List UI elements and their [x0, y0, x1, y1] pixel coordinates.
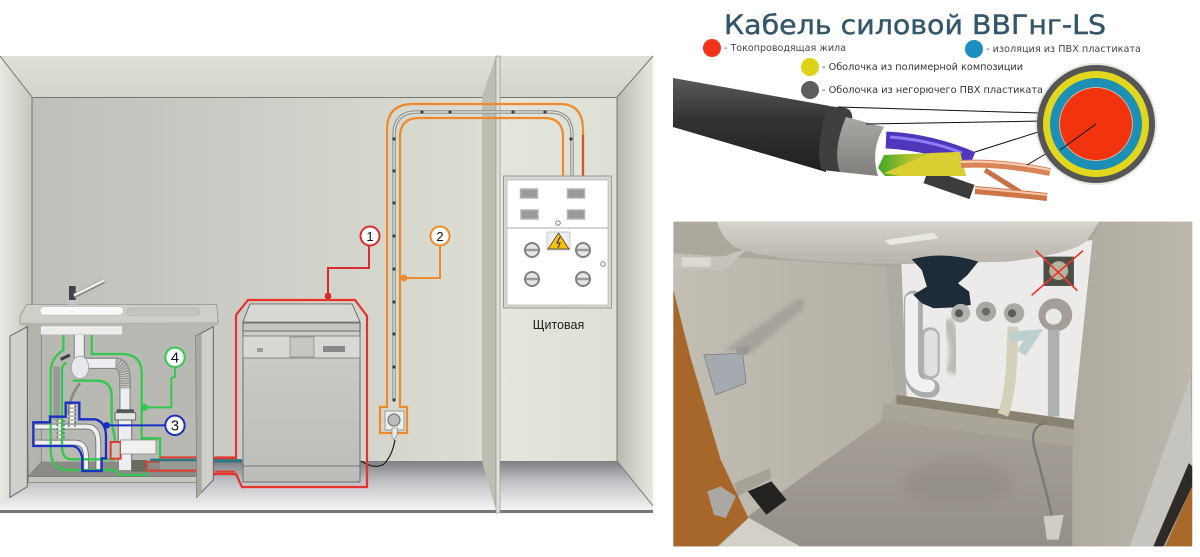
- inlet hose: [1003, 327, 1033, 415]
- shelf back strip: [896, 395, 1074, 429]
- hinge lower: [707, 468, 787, 518]
- callout 1: 1: [366, 229, 374, 244]
- breakers: [525, 243, 590, 286]
- partition wall: [482, 56, 500, 513]
- meters: [520, 189, 584, 219]
- wooden door: [673, 290, 748, 546]
- drain rubber fitting: [912, 255, 978, 308]
- green cable zone 4: [51, 335, 160, 475]
- cabinet floor: [28, 462, 197, 477]
- chrome valves: [951, 302, 1024, 323]
- cabinet floor: [748, 420, 1072, 546]
- left cabinet side: [27, 325, 42, 477]
- label: switch room: Щитовая: [533, 318, 584, 332]
- countertop: [20, 305, 218, 324]
- counter underside: [21, 323, 218, 325]
- appliance power lead: [361, 440, 395, 466]
- callout 2: 2: [436, 229, 444, 244]
- purple conductor: [886, 140, 972, 160]
- callout 3: 3: [171, 419, 179, 435]
- plate tab: [736, 345, 749, 355]
- legend: conductor: [703, 39, 846, 57]
- cabinet interior: [28, 323, 213, 477]
- black conductor: [926, 176, 972, 192]
- sticker: [885, 233, 939, 245]
- shelf lip: [881, 404, 1074, 446]
- electrical box: [111, 440, 156, 472]
- sink underside: [717, 222, 1099, 264]
- photo base: [673, 222, 1192, 546]
- teal cable: [160, 459, 242, 462]
- callout 3: [103, 416, 185, 435]
- cable cross-section circles: [1035, 63, 1157, 185]
- back wall of switch room: [500, 97, 617, 462]
- light corner lower left: [719, 518, 800, 546]
- wall post: [886, 267, 907, 396]
- floor base strip: [0, 510, 653, 513]
- leader lines: [838, 107, 1096, 165]
- flexible hoses: [57, 355, 80, 420]
- ceiling line: [0, 56, 653, 506]
- dishwasher: [243, 304, 360, 482]
- plug: [1043, 515, 1064, 540]
- back wall: [896, 240, 1092, 420]
- legend: fire-retardant sheath: - Оболочка из негорючего ПВХ пластиката: [822, 85, 1043, 96]
- legend: fire-retardant sheath: [801, 81, 1043, 99]
- legend: conductor: - Токопроводящая жила: [724, 43, 846, 54]
- warning sign: [547, 232, 570, 250]
- legend: insulation: [965, 40, 1141, 58]
- legend: insulation: - изоляция из ПВХ пластиката: [986, 44, 1141, 55]
- white trap pipes: [912, 300, 931, 388]
- legend: polymer sheath: - Оболочка из полимерной композиции: [822, 62, 1023, 73]
- dark door edge: [1153, 463, 1192, 546]
- blue cable zone 3: [33, 403, 106, 471]
- faucet: [68, 280, 104, 305]
- title: Кабель силовой ВВГнг-LS: [724, 10, 1106, 41]
- back wall of kitchen: [32, 97, 482, 462]
- trap: [71, 356, 89, 379]
- floor: [0, 461, 653, 511]
- soft shadow on left wall: [724, 297, 805, 353]
- cabinet base: [28, 477, 197, 483]
- red cable zone 1: [198, 300, 367, 487]
- flange centre: [1046, 309, 1062, 325]
- yellow stripe: [884, 152, 966, 176]
- floor shading: [903, 460, 1011, 506]
- cold and hot water pipes: [35, 405, 98, 470]
- trap shadow: [947, 320, 955, 373]
- conduit clips: [392, 110, 573, 402]
- right side wall: [617, 56, 653, 506]
- copper strands: [961, 162, 1050, 197]
- callout 1: [325, 226, 380, 299]
- legend: polymer sheath: [801, 58, 1023, 76]
- room ceiling band: [0, 56, 653, 98]
- socket: [385, 411, 404, 440]
- red segment near panel: [582, 135, 584, 176]
- green and yellow conductor: [878, 152, 966, 176]
- inner gray sheath: [837, 117, 884, 176]
- appliance cord: [1033, 423, 1052, 516]
- wood lower right: [1165, 486, 1192, 546]
- drain flange: [1038, 298, 1072, 332]
- sink bowl: [41, 326, 122, 335]
- removed socket with red cross: [1032, 251, 1083, 295]
- cable body: [673, 78, 830, 172]
- panel: under-sink photograph: [673, 222, 1192, 546]
- pipe flange: [115, 409, 136, 420]
- callout 4: 4: [171, 351, 179, 367]
- purple highlight: [890, 137, 962, 153]
- callout 4: [141, 348, 185, 411]
- left door: [10, 327, 27, 497]
- sink basin: [40, 307, 200, 315]
- left side wall: [0, 56, 32, 505]
- right door: [196, 327, 213, 497]
- panel: cable cross-section: [673, 10, 1157, 197]
- electrical panel: [504, 176, 612, 308]
- panel knobs: [556, 221, 605, 266]
- left bracket top: [673, 248, 748, 270]
- drain pipes: [79, 335, 125, 470]
- conduit: [394, 112, 572, 400]
- hinge plate: [704, 353, 746, 395]
- control plate top-left: [682, 257, 711, 267]
- drain hose: [1037, 330, 1071, 416]
- panel: room wiring diagram: [0, 56, 653, 513]
- cut ring of outer sheath: [819, 106, 852, 172]
- orange cable zone 2: [380, 104, 583, 433]
- right door strip: [1130, 377, 1192, 546]
- left cabinet wall: [673, 253, 895, 516]
- right cabinet wall: [1072, 222, 1192, 546]
- callout 2: [401, 226, 450, 281]
- floor cable bundle: [147, 457, 242, 472]
- sink cabinet group: [10, 280, 242, 497]
